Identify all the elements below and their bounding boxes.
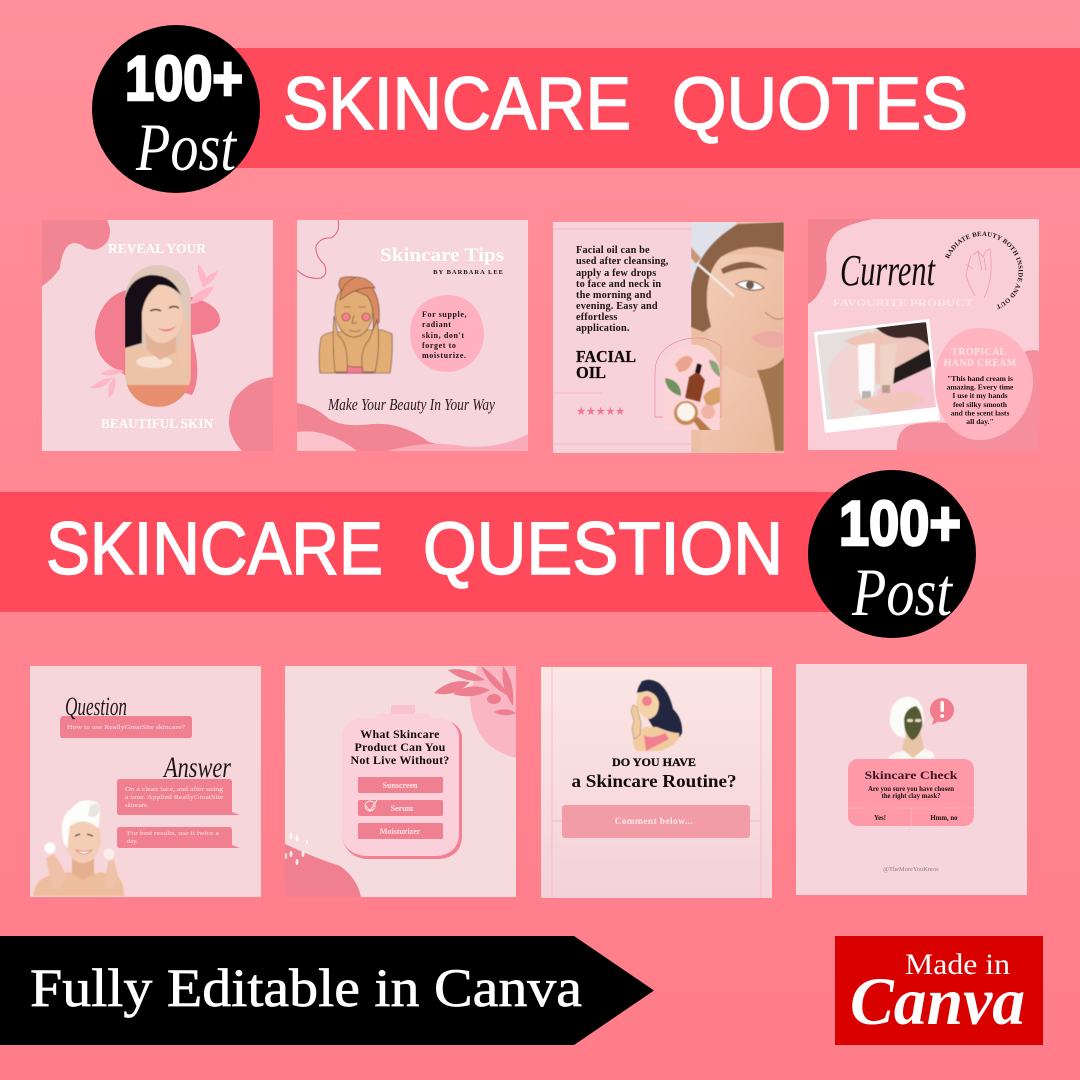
bubble: tip: day. — [127, 838, 138, 845]
waves — [297, 403, 437, 451]
squiggle line — [297, 220, 339, 278]
card title: Skincare Check — [864, 768, 958, 782]
leaves — [90, 264, 218, 398]
body text: the morning and — [576, 290, 652, 301]
thin arch outline — [655, 338, 721, 417]
card buttons: Yes! — [874, 815, 886, 822]
body text: apply a few drops — [576, 268, 656, 279]
badge: 100+ post bottom — [808, 470, 976, 638]
illustration: woman with clay mask — [888, 697, 935, 759]
bubble: answer: skincare. — [125, 802, 149, 809]
callout text: radiant — [422, 320, 452, 329]
badge: made in canva: Canva — [850, 963, 1025, 1039]
panel: facial oil — [553, 222, 784, 453]
clipboard title: Product Can You — [354, 740, 446, 754]
option: moisturizer — [358, 823, 443, 839]
body text: used after cleansing, — [576, 256, 669, 267]
callout heading: TROPICAL — [951, 347, 1007, 358]
badge: 100+ post top: 100+ — [125, 44, 243, 114]
banner: skincare quotes — [175, 48, 1080, 168]
badge: 100+ post bottom: 100+ — [839, 489, 961, 559]
illustration: woman touching cheek — [631, 680, 682, 751]
heading: facial oil: FACIAL — [576, 347, 636, 366]
option: sunscreen: Sunscreen — [383, 781, 418, 790]
callout text: skin, don't — [422, 331, 465, 340]
bubble: question: How to use ReallyGreatSite skincare? — [67, 724, 185, 731]
icon: alert bubble — [930, 698, 954, 725]
callout quote: "This hand cream is — [947, 374, 1013, 383]
callout quote: and the scent lasts — [951, 408, 1009, 418]
star rating: ★★★★★ — [576, 406, 625, 418]
photo: woman with towel — [33, 800, 124, 896]
text: reveal your: REVEAL YOUR — [108, 242, 207, 257]
option: sunscreen — [358, 777, 443, 793]
handle: @TheMoreYouKnow — [883, 866, 939, 873]
callout heading — [944, 348, 1016, 366]
alert card — [848, 759, 974, 826]
icon: hand outline — [966, 249, 991, 298]
clipboard title — [351, 727, 449, 767]
card question: the right clay mask? — [881, 793, 941, 800]
body text: application. — [576, 323, 630, 334]
panel: product poll — [285, 666, 516, 897]
byline: BY BARBARA LEE — [433, 269, 504, 276]
script: question: Question — [65, 692, 127, 721]
blob: top right — [470, 666, 516, 758]
frame lines — [552, 667, 761, 898]
comment box: Comment below... — [615, 816, 693, 826]
callout text: moisturize. — [422, 351, 467, 360]
option: serum — [358, 800, 443, 816]
text: a skincare routine: a Skincare Routine? — [572, 771, 736, 791]
script: answer: Answer — [163, 751, 231, 784]
panel: skincare routine — [541, 667, 772, 898]
subheading: favourite product: FAVOURITE PRODUCT — [833, 299, 974, 309]
callout quote: I use it my hands — [952, 391, 1008, 400]
callout quote: feel silky smooth — [953, 400, 1008, 409]
heading: skincare quotes: QUOTES — [672, 62, 968, 145]
circle callout: tropical hand cream — [935, 328, 1033, 440]
blob: centre — [95, 290, 220, 395]
panel: current favourite product — [808, 219, 1039, 450]
blob: bottom right — [897, 350, 1039, 450]
comment box — [562, 805, 750, 838]
badge: made in canva: Made in — [905, 948, 1010, 981]
panel: question and answer — [30, 666, 261, 897]
illustration: woman with headband — [319, 277, 392, 373]
badge: 100+ post top — [92, 25, 260, 193]
body text: effortless — [576, 312, 618, 323]
photo: woman applying oil — [691, 222, 784, 453]
script tagline: Make Your Beauty In Your Way — [327, 395, 495, 414]
card question: Are you sure you have chosen — [868, 786, 954, 793]
card buttons: Hmm, no — [930, 815, 958, 822]
badge: 100+ post top: Post — [135, 109, 238, 185]
heading: skincare question: SKINCARE — [46, 507, 383, 590]
photo: smiling woman — [125, 265, 191, 407]
clipboard — [342, 705, 462, 859]
thin frame lines — [553, 229, 691, 444]
callout text: For supple, — [422, 310, 467, 319]
script heading: current: Current — [840, 246, 936, 295]
card buttons — [874, 815, 958, 822]
arrow banner: fully editable in canva — [0, 936, 654, 1045]
polaroid photo — [808, 319, 948, 433]
arrow banner: fully editable in canva: Fully Editable in Canva — [30, 958, 582, 1018]
blob: bottom left — [285, 844, 361, 897]
panel: reveal your beautiful skin — [42, 220, 273, 451]
body text: Facial oil can be — [576, 245, 650, 256]
bubble: answer: On a clean face, and after using — [125, 786, 224, 793]
callout quote — [947, 374, 1014, 426]
heading: facial oil: OIL — [576, 363, 606, 382]
blob: top left — [42, 220, 110, 286]
bubble: tip — [117, 827, 240, 848]
panel: skincare check — [796, 664, 1027, 895]
panel: skincare tips — [297, 220, 528, 451]
body text: to face and neck in — [576, 279, 661, 290]
text: beautiful skin: BEAUTIFUL SKIN — [101, 417, 213, 432]
body text: evening. Easy and — [576, 301, 658, 312]
blob: top left — [808, 219, 873, 304]
badge: 100+ post bottom: Post — [851, 554, 954, 630]
bubble: answer — [117, 779, 240, 815]
option: moisturizer: Moisturizer — [380, 827, 421, 836]
card question — [868, 786, 954, 800]
body text — [576, 245, 669, 334]
callout heading: HAND CREAM — [944, 358, 1017, 369]
text: do you have: DO YOU HAVE — [612, 755, 696, 769]
heading: skincare quotes: SKINCARE — [283, 62, 631, 145]
heading: facial oil — [576, 350, 636, 378]
title: Skincare Tips — [380, 245, 504, 266]
heading: skincare quotes — [283, 62, 968, 145]
callout circle — [410, 295, 484, 372]
badge: made in canva — [835, 936, 1043, 1045]
callout quote: all day." — [966, 417, 994, 426]
callout text: forget to — [422, 341, 456, 350]
heading: skincare question — [46, 507, 783, 590]
bubble: tip: For best results, use it twice a — [127, 830, 219, 837]
white dots — [285, 833, 308, 865]
heading: skincare question: QUESTION — [423, 507, 783, 590]
photo: hands holding tubes — [817, 322, 936, 420]
bubble: question — [54, 716, 192, 738]
banner: skincare question — [0, 492, 850, 612]
leaves — [434, 666, 516, 715]
clipboard title: What Skincare — [360, 727, 440, 741]
blob: bottom right — [229, 377, 273, 451]
clipboard title: Not Live Without? — [351, 753, 449, 767]
callout quote: amazing. Every time — [947, 382, 1014, 392]
callout text — [422, 310, 467, 360]
option: serum: Serum — [391, 804, 414, 813]
photo: facial oil products — [663, 342, 720, 432]
circular text: RADIATE BEAUTY BOTH INSIDE AND OUT — [945, 232, 1023, 310]
bubble: answer: a tone. Applied ReallyGreatSite — [125, 794, 223, 801]
